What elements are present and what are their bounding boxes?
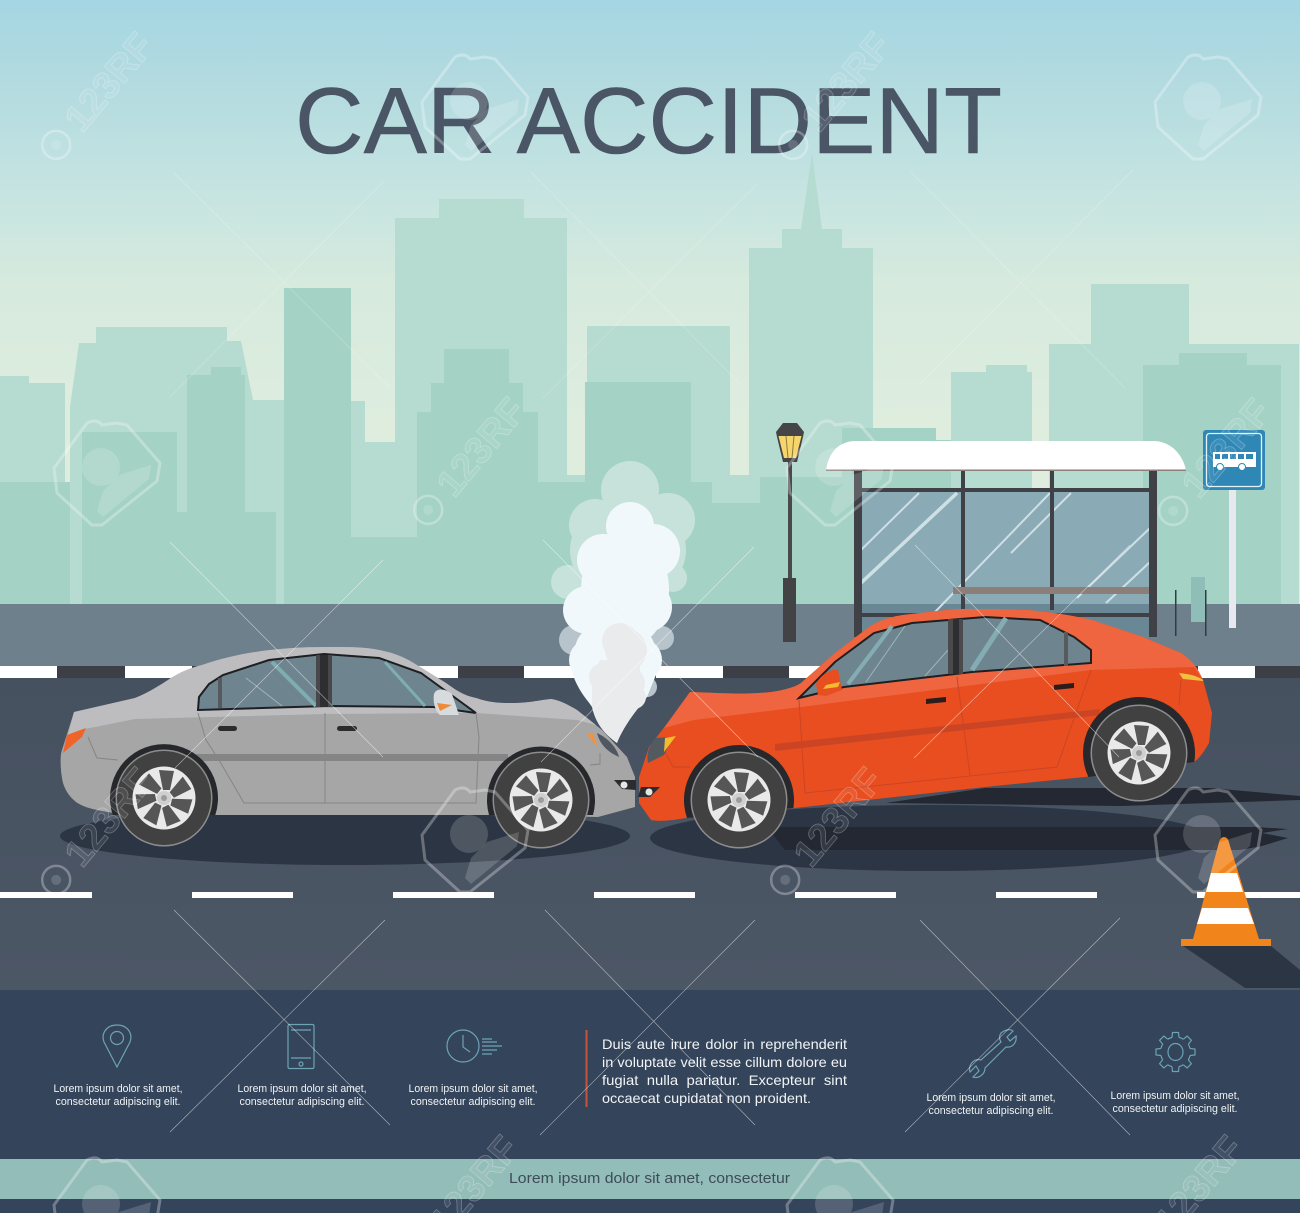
accent rule — [586, 1030, 588, 1107]
red car stripe — [775, 709, 1100, 751]
grey car wheel arches — [110, 744, 595, 815]
sixth caption: Lorem ipsum dolor sit amet, — [1110, 1090, 1240, 1102]
cone body — [1193, 837, 1259, 939]
red car window reflections — [848, 618, 1006, 684]
red car head light — [647, 736, 676, 763]
red car window — [799, 617, 1091, 698]
fifth caption — [926, 1092, 1056, 1117]
lane markings — [0, 892, 1300, 898]
second caption: consectetur adipiscing elit. — [240, 1096, 364, 1108]
red car door handles — [926, 683, 1074, 704]
centre paragraph — [602, 1036, 847, 1106]
red car fog lamp — [638, 787, 660, 797]
icon: wrench — [970, 1030, 1016, 1077]
smoke main plume — [563, 502, 680, 743]
first caption: Lorem ipsum dolor sit amet, — [54, 1083, 182, 1095]
grey car door handles — [218, 726, 357, 731]
centre paragraph: fugiat nulla pariatur. Excepteur sint — [602, 1072, 847, 1088]
second caption — [238, 1083, 366, 1108]
sidewalk — [0, 604, 1300, 666]
red car rear wheel — [1090, 704, 1188, 802]
centre paragraph: in voluptate velit esse cillum dolore eu — [602, 1054, 847, 1070]
bike rack — [1175, 577, 1206, 636]
grey car panel lines — [88, 713, 600, 803]
grey car mirror — [434, 690, 459, 715]
third caption: consectetur adipiscing elit. — [410, 1096, 536, 1108]
icon: gear — [1156, 1032, 1195, 1072]
grey car — [61, 647, 636, 848]
cone shadow — [1183, 946, 1300, 988]
grey car front wheel — [492, 752, 590, 848]
shelter roof — [826, 441, 1186, 470]
bus shelter — [826, 441, 1186, 638]
bottom information panel — [0, 990, 1300, 1213]
street lamp — [776, 423, 804, 642]
smoke cloud — [551, 461, 695, 743]
traffic cone — [1181, 837, 1300, 988]
grey car head light — [597, 733, 619, 757]
car shadows — [60, 788, 1300, 871]
fifth caption: consectetur adipiscing elit. — [928, 1105, 1054, 1117]
shelter frame — [854, 470, 1157, 637]
grey car window reflections — [246, 662, 425, 706]
grey car tail light — [63, 728, 86, 753]
red car front wheel — [690, 752, 788, 848]
icon: location pin — [103, 1025, 131, 1067]
road surface — [0, 678, 1300, 990]
shelter glass — [860, 492, 1150, 604]
icon: bus stop sign — [1203, 430, 1265, 628]
grey car upper panel — [68, 647, 596, 735]
third caption: Lorem ipsum dolor sit amet, — [408, 1083, 538, 1095]
red car — [638, 609, 1212, 848]
grey car body — [61, 647, 635, 817]
footer strip — [0, 1159, 1300, 1199]
shelter bench — [953, 587, 1149, 594]
icon: smartphone — [288, 1024, 314, 1068]
icon: fast clock — [447, 1030, 502, 1062]
grey car window — [198, 654, 476, 713]
grey car rear wheel — [116, 750, 212, 846]
smoke back layer — [551, 461, 695, 600]
second caption: Lorem ipsum dolor sit amet, — [238, 1083, 366, 1095]
footer text: Lorem ipsum dolor sit amet, consectetur — [509, 1171, 790, 1187]
grey car stripe — [196, 754, 508, 761]
red car door pillar — [948, 619, 1068, 674]
red car mirror — [816, 670, 842, 696]
smoke inner grey — [589, 623, 647, 743]
first caption: consectetur adipiscing elit. — [56, 1096, 180, 1108]
red car wheel arches — [684, 697, 1195, 818]
centre paragraph: Duis aute irure dolor in reprehenderit — [602, 1036, 847, 1052]
sky background — [0, 0, 1300, 610]
first caption — [54, 1083, 182, 1108]
red car body — [639, 609, 1212, 821]
fifth caption: Lorem ipsum dolor sit amet, — [926, 1092, 1056, 1104]
red car tail light — [1179, 673, 1203, 681]
grey car fog lamp — [614, 780, 636, 790]
sixth caption: consectetur adipiscing elit. — [1112, 1103, 1238, 1115]
curb dashes — [0, 666, 1300, 678]
red car panel lines — [664, 670, 1181, 793]
third caption — [408, 1083, 538, 1108]
grey car door pillar — [218, 655, 332, 708]
title: CAR ACCIDENT — [295, 68, 1002, 173]
city skyline — [0, 153, 1299, 604]
centre paragraph: occaecat cupidatat non proident. — [602, 1090, 811, 1106]
sixth caption — [1110, 1090, 1240, 1115]
red car upper panel — [664, 609, 1204, 728]
